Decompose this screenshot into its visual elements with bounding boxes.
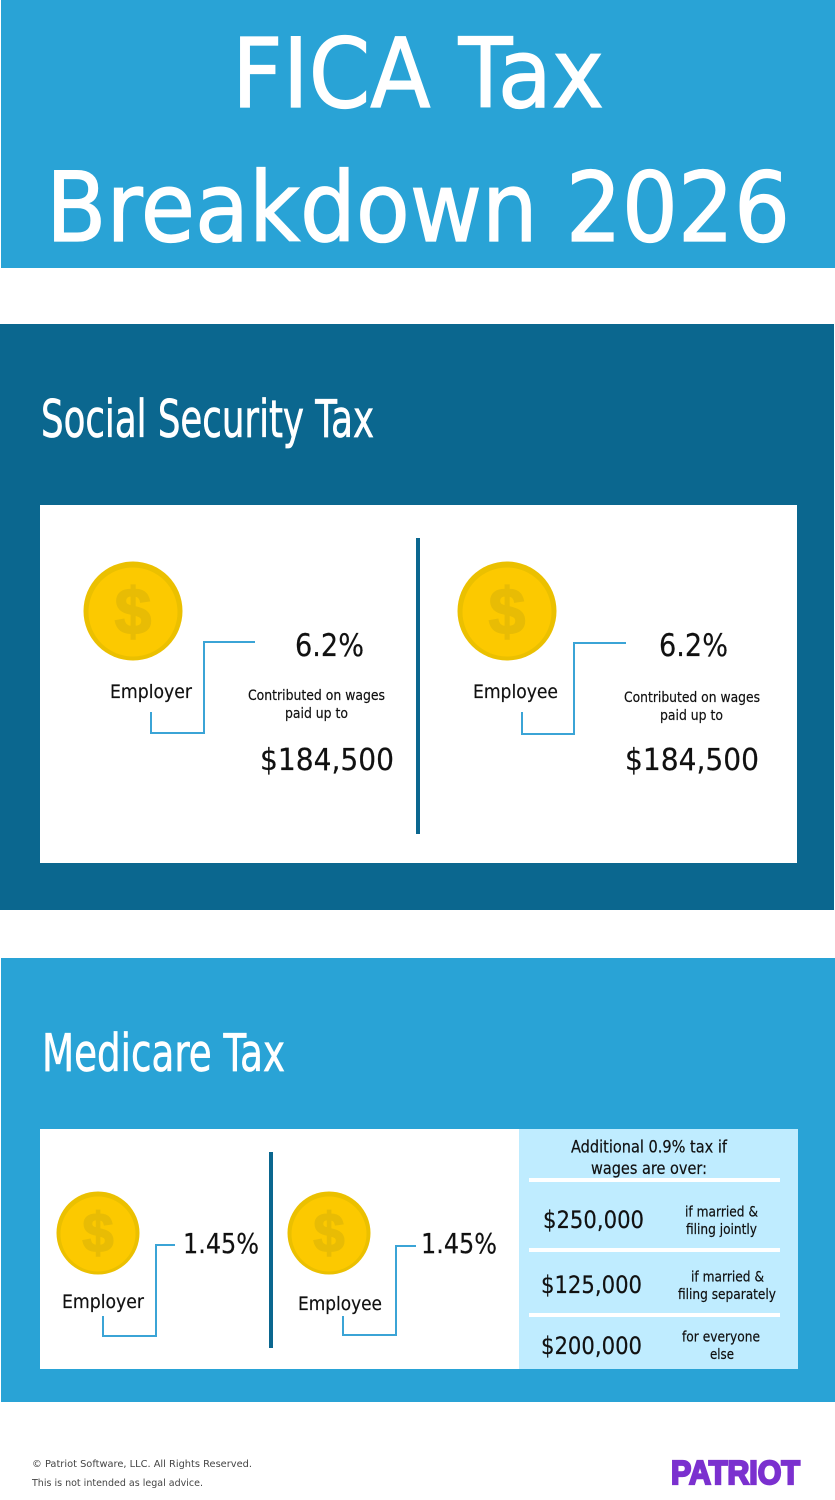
employee rate block: $184,500 (625, 743, 759, 778)
label: employee: Employee (298, 1294, 382, 1315)
icon: employer coin (56, 1192, 140, 1274)
row: married filing separately: if married & (691, 1270, 764, 1286)
divider: employer and employee (269, 1152, 273, 1348)
footer legal text: This is not intended as legal advice. (31, 1478, 203, 1489)
divider: employer and employee (416, 538, 420, 834)
panel: medicare tax (1, 958, 835, 1402)
white card: social security (40, 505, 797, 863)
employer rate block: Contributed on wages (248, 688, 385, 704)
row: everyone else: $200,000 (541, 1332, 642, 1360)
employee rate block: 6.2% (659, 628, 728, 664)
icon: employee coin: $ (489, 574, 525, 648)
row: married filing separately: $125,000 (541, 1271, 642, 1299)
panel: social security tax (0, 324, 834, 910)
footer legal text (31, 1459, 252, 1489)
logo: patriot: PATRIOT (671, 1454, 800, 1491)
label: employer: Employer (62, 1292, 144, 1313)
connector: employee to rate (522, 643, 626, 734)
employer rate block: $184,500 (260, 743, 394, 778)
icon: employee coin (458, 562, 556, 660)
row: everyone else: for everyone (682, 1330, 760, 1346)
icon: employer coin: $ (115, 574, 151, 648)
rate: employee 1.45%: 1.45% (421, 1227, 497, 1260)
table heading: wages are over: (591, 1159, 707, 1178)
icon: employer coin: $ (82, 1201, 114, 1264)
icon: employee coin: $ (313, 1201, 345, 1264)
row: married filing jointly: $250,000 (543, 1206, 644, 1234)
employee rate block: Contributed on wages (624, 690, 760, 706)
panel: additional medicare tax (519, 1129, 798, 1369)
heading: social security tax: Social Security Tax (41, 390, 374, 450)
employee rate block (624, 628, 760, 778)
label: employee: Employee (473, 682, 558, 703)
footer legal text: © Patriot Software, LLC. All Rights Reserved. (32, 1459, 252, 1470)
row: married filing jointly: if married & (685, 1204, 758, 1220)
header banner (1, 0, 835, 268)
icon: employee coin (288, 1192, 370, 1274)
employer rate block (248, 628, 394, 778)
row: everyone else: else (710, 1347, 734, 1363)
row: married filing jointly (543, 1204, 758, 1238)
white card: medicare (40, 1129, 519, 1369)
title: Breakdown 2026 (46, 152, 790, 264)
row: married filing separately (541, 1270, 776, 1303)
connector: employer to rate (103, 1245, 175, 1336)
table heading: Additional 0.9% tax if (571, 1138, 728, 1156)
row: everyone else (541, 1330, 760, 1363)
table heading (571, 1138, 728, 1178)
rate: employer 1.45%: 1.45% (183, 1227, 259, 1260)
row: married filing jointly: filing jointly (686, 1222, 757, 1238)
label: employer: Employer (110, 682, 192, 703)
row: married filing separately: filing separately (678, 1287, 776, 1303)
employer rate block: 6.2% (295, 628, 364, 664)
employee rate block: paid up to (660, 708, 723, 724)
title (46, 18, 790, 264)
heading: medicare tax: Medicare Tax (42, 1024, 285, 1084)
icon: employer coin (84, 562, 182, 660)
employer rate block: paid up to (285, 706, 348, 722)
connector: employer to rate (151, 642, 255, 733)
title: FICA Tax (232, 18, 604, 130)
connector: employee to rate (343, 1246, 416, 1335)
